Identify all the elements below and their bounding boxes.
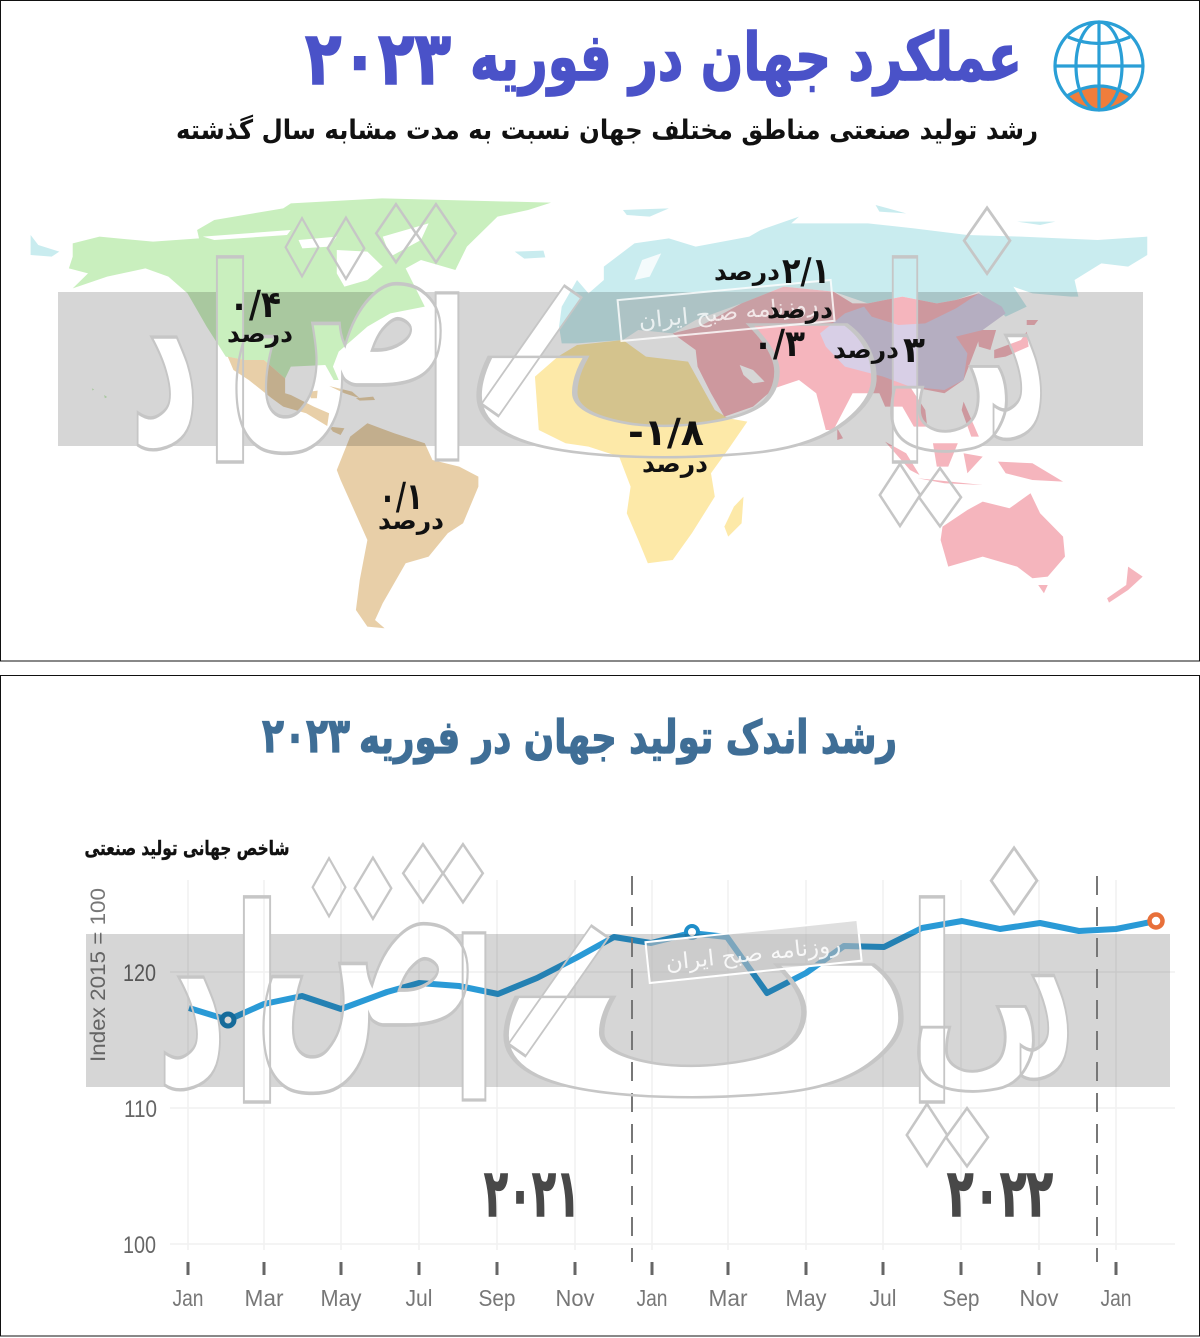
line: production index <box>189 921 1156 1026</box>
watermark: ں <box>909 916 1045 1103</box>
label: russia: درصد <box>714 257 780 286</box>
title: عملکرد جهان در فوریه <box>470 19 1022 97</box>
watermark: ا <box>447 255 607 459</box>
watermark: ◆ <box>919 446 961 535</box>
dashed marker lines <box>632 876 1097 1262</box>
y axis labels: 120 <box>123 960 156 987</box>
label: russia <box>714 251 830 292</box>
region: africa <box>535 340 747 563</box>
y axis labels <box>123 960 157 1259</box>
y axis title: Index 2015 = 100 <box>87 888 110 1062</box>
y axis labels: 100 <box>123 1232 156 1259</box>
stamp: newspaper <box>618 280 835 341</box>
watermark: ا <box>231 851 283 1166</box>
region: asia and oceania <box>673 287 1143 603</box>
title: ۲۰۲۳ <box>305 16 451 102</box>
label: africa: -۱/۸ <box>628 411 704 454</box>
marker: latest value <box>1150 914 1162 928</box>
watermark: ◆ <box>416 184 456 272</box>
chart heading: شاخص جهانی تولید صنعتی <box>84 836 290 860</box>
stamp: newspaper <box>645 920 862 983</box>
label: africa <box>628 411 708 478</box>
watermark: د <box>1013 852 1075 1132</box>
year label 2022: ۲۰۲۲ <box>947 1155 1053 1232</box>
chart title <box>262 708 897 764</box>
x axis labels: Sep <box>942 1285 980 1311</box>
title <box>305 16 1022 102</box>
x axis labels: Sep <box>478 1285 516 1311</box>
watermark: ا <box>474 895 634 1099</box>
watermark: ا <box>908 851 956 1166</box>
x axis labels: Nov <box>1020 1285 1059 1311</box>
watermark: د <box>129 205 201 507</box>
label: north america: درصد <box>227 319 293 348</box>
chart title: ۲۰۲۳ <box>262 708 350 764</box>
x axis labels: Jan <box>172 1285 204 1311</box>
x axis labels: May <box>320 1285 362 1311</box>
y axis labels: 110 <box>124 1096 157 1123</box>
watermark: ◆ <box>312 837 346 925</box>
stamp: newspaper: روزنامه صبح ایران <box>638 292 819 334</box>
watermark: ◆ <box>907 1081 948 1176</box>
watermark: ص <box>253 765 481 1094</box>
label: asia: ۰/۳ <box>753 322 805 365</box>
label: south america <box>378 475 444 535</box>
x axis labels: Jan <box>636 1285 668 1311</box>
watermark: ا <box>204 211 256 526</box>
label: africa: درصد <box>642 449 708 478</box>
icon: globe <box>1055 22 1143 110</box>
watermark: ◆ <box>403 824 443 912</box>
watermark: ا <box>425 255 469 512</box>
watermark: ں <box>445 184 915 475</box>
gray band <box>86 934 1170 1087</box>
watermark: ◆ <box>376 184 416 272</box>
x axis labels: Jul <box>870 1285 896 1311</box>
panel: world map <box>0 0 1200 661</box>
watermark: ◆ <box>328 195 365 288</box>
region: russia and europe <box>559 205 1147 343</box>
watermark <box>129 125 1048 536</box>
watermark <box>156 765 1075 1176</box>
x axis labels <box>172 1285 1132 1311</box>
watermark: ا <box>452 895 496 1152</box>
watermark: ص <box>226 125 454 454</box>
label: china: ۳ <box>903 330 925 371</box>
watermark: ں <box>472 824 942 1115</box>
x axis ticks <box>188 1262 1116 1275</box>
map: world regions <box>31 198 1147 628</box>
label: north america: ۰/۴ <box>229 283 281 326</box>
watermark: ◆ <box>880 441 921 536</box>
region: north america <box>69 198 551 398</box>
label: south america: ۰/۱ <box>379 475 423 518</box>
subtitle: رشد تولید صنعتی مناطق مختلف جهان نسبت به مدت مشابه سال گذشته <box>176 114 1038 146</box>
region: china <box>820 293 1006 390</box>
x axis labels: May <box>786 1285 827 1311</box>
panel: line chart <box>0 676 1200 1336</box>
label: asia: درصد <box>767 295 833 324</box>
x axis labels: Mar <box>708 1285 748 1311</box>
region: latin america <box>228 357 478 628</box>
year label 2021: ۲۰۲۱ <box>484 1155 580 1232</box>
watermark: ◆ <box>443 824 483 912</box>
region: chukotka and iceland <box>31 235 545 259</box>
label: china <box>833 330 925 371</box>
watermark: ا <box>881 211 929 526</box>
watermark: د <box>986 212 1048 492</box>
x axis labels: Nov <box>556 1285 595 1311</box>
chart title: رشد اندک تولید جهان در فوریه <box>359 710 897 764</box>
watermark: ں <box>882 276 1018 463</box>
watermark: ◆ <box>946 1086 988 1175</box>
label: china: درصد <box>833 335 899 364</box>
watermark: ◆ <box>355 835 392 928</box>
watermark: ◆ <box>991 824 1037 924</box>
label: south america: درصد <box>378 506 444 535</box>
label: russia: ۲/۱ <box>782 251 830 292</box>
watermark: د <box>156 845 228 1147</box>
x axis labels: Jan <box>1100 1285 1132 1311</box>
gray band <box>58 292 1143 446</box>
x axis labels: Jul <box>406 1285 432 1311</box>
x axis labels: Mar <box>244 1285 284 1311</box>
label: asia <box>753 295 833 365</box>
watermark: ◆ <box>285 197 319 285</box>
label: north america <box>227 283 293 348</box>
watermark: ◆ <box>964 184 1010 284</box>
stamp: newspaper: روزنامه صبح ایران <box>665 933 842 976</box>
